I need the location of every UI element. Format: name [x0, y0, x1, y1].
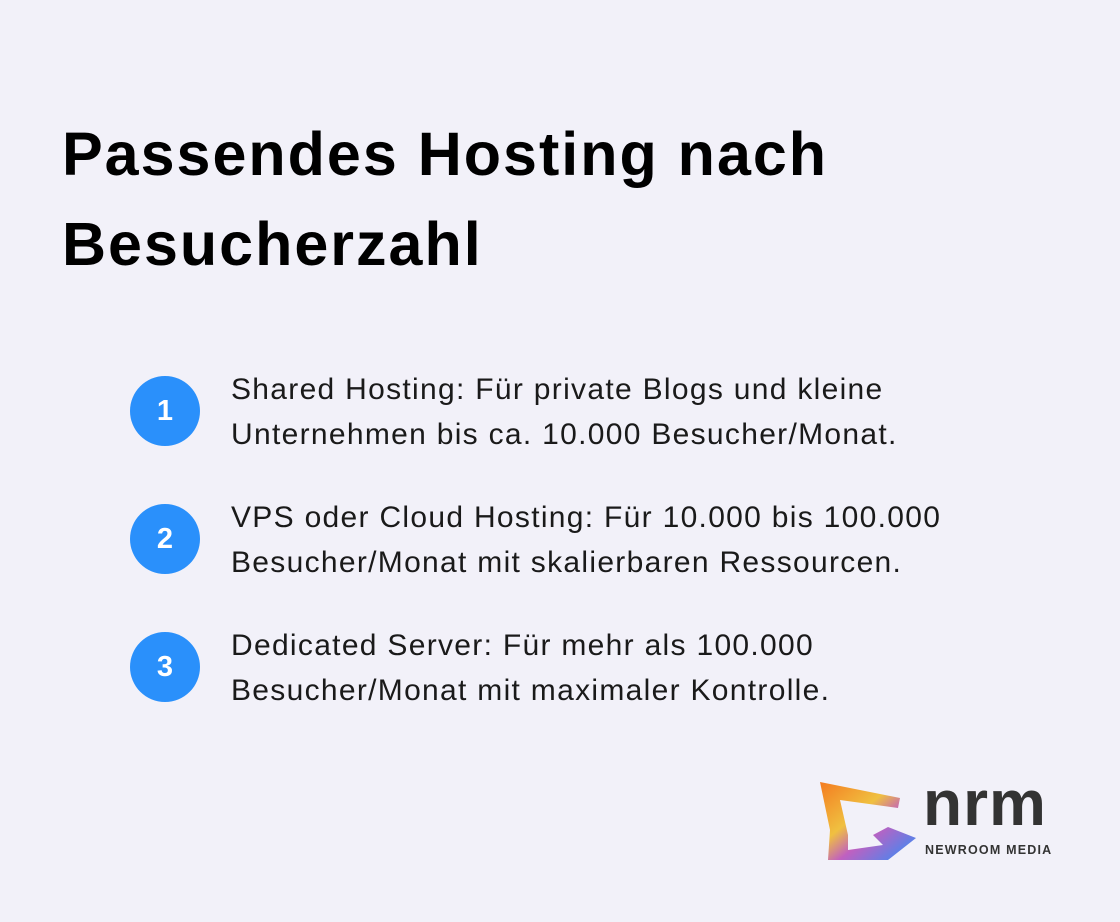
- text 2: [231, 501, 941, 579]
- text 3: [231, 629, 830, 707]
- text 3: Besucher/Monat mit maximaler Kontrolle.: [231, 674, 830, 707]
- badge 3: [130, 632, 200, 702]
- logo icon: [820, 782, 916, 860]
- text 3: Dedicated Server: Für mehr als 100.000: [231, 629, 814, 662]
- logo wordmark: nrm: [923, 767, 1047, 839]
- item 3: [130, 629, 830, 707]
- badge 3: 3: [157, 651, 173, 683]
- title: Passendes Hosting nach: [62, 120, 828, 188]
- badge 2: [130, 504, 200, 574]
- text 2: VPS oder Cloud Hosting: Für 10.000 bis 100.000: [231, 501, 941, 534]
- text 1: [231, 373, 898, 451]
- logo subtitle: NEWROOM MEDIA: [925, 843, 1052, 857]
- title: Besucherzahl: [62, 210, 483, 278]
- badge 1: [130, 376, 200, 446]
- text 1: Shared Hosting: Für private Blogs und kleine: [231, 373, 884, 406]
- text 1: Unternehmen bis ca. 10.000 Besucher/Monat.: [231, 418, 898, 451]
- logo: [820, 767, 1052, 860]
- badge 2: 2: [157, 523, 173, 555]
- title: [62, 120, 828, 278]
- item 2: [130, 501, 941, 579]
- item 1: [130, 373, 898, 451]
- badge 1: 1: [157, 395, 173, 427]
- text 2: Besucher/Monat mit skalierbaren Ressourcen.: [231, 546, 902, 579]
